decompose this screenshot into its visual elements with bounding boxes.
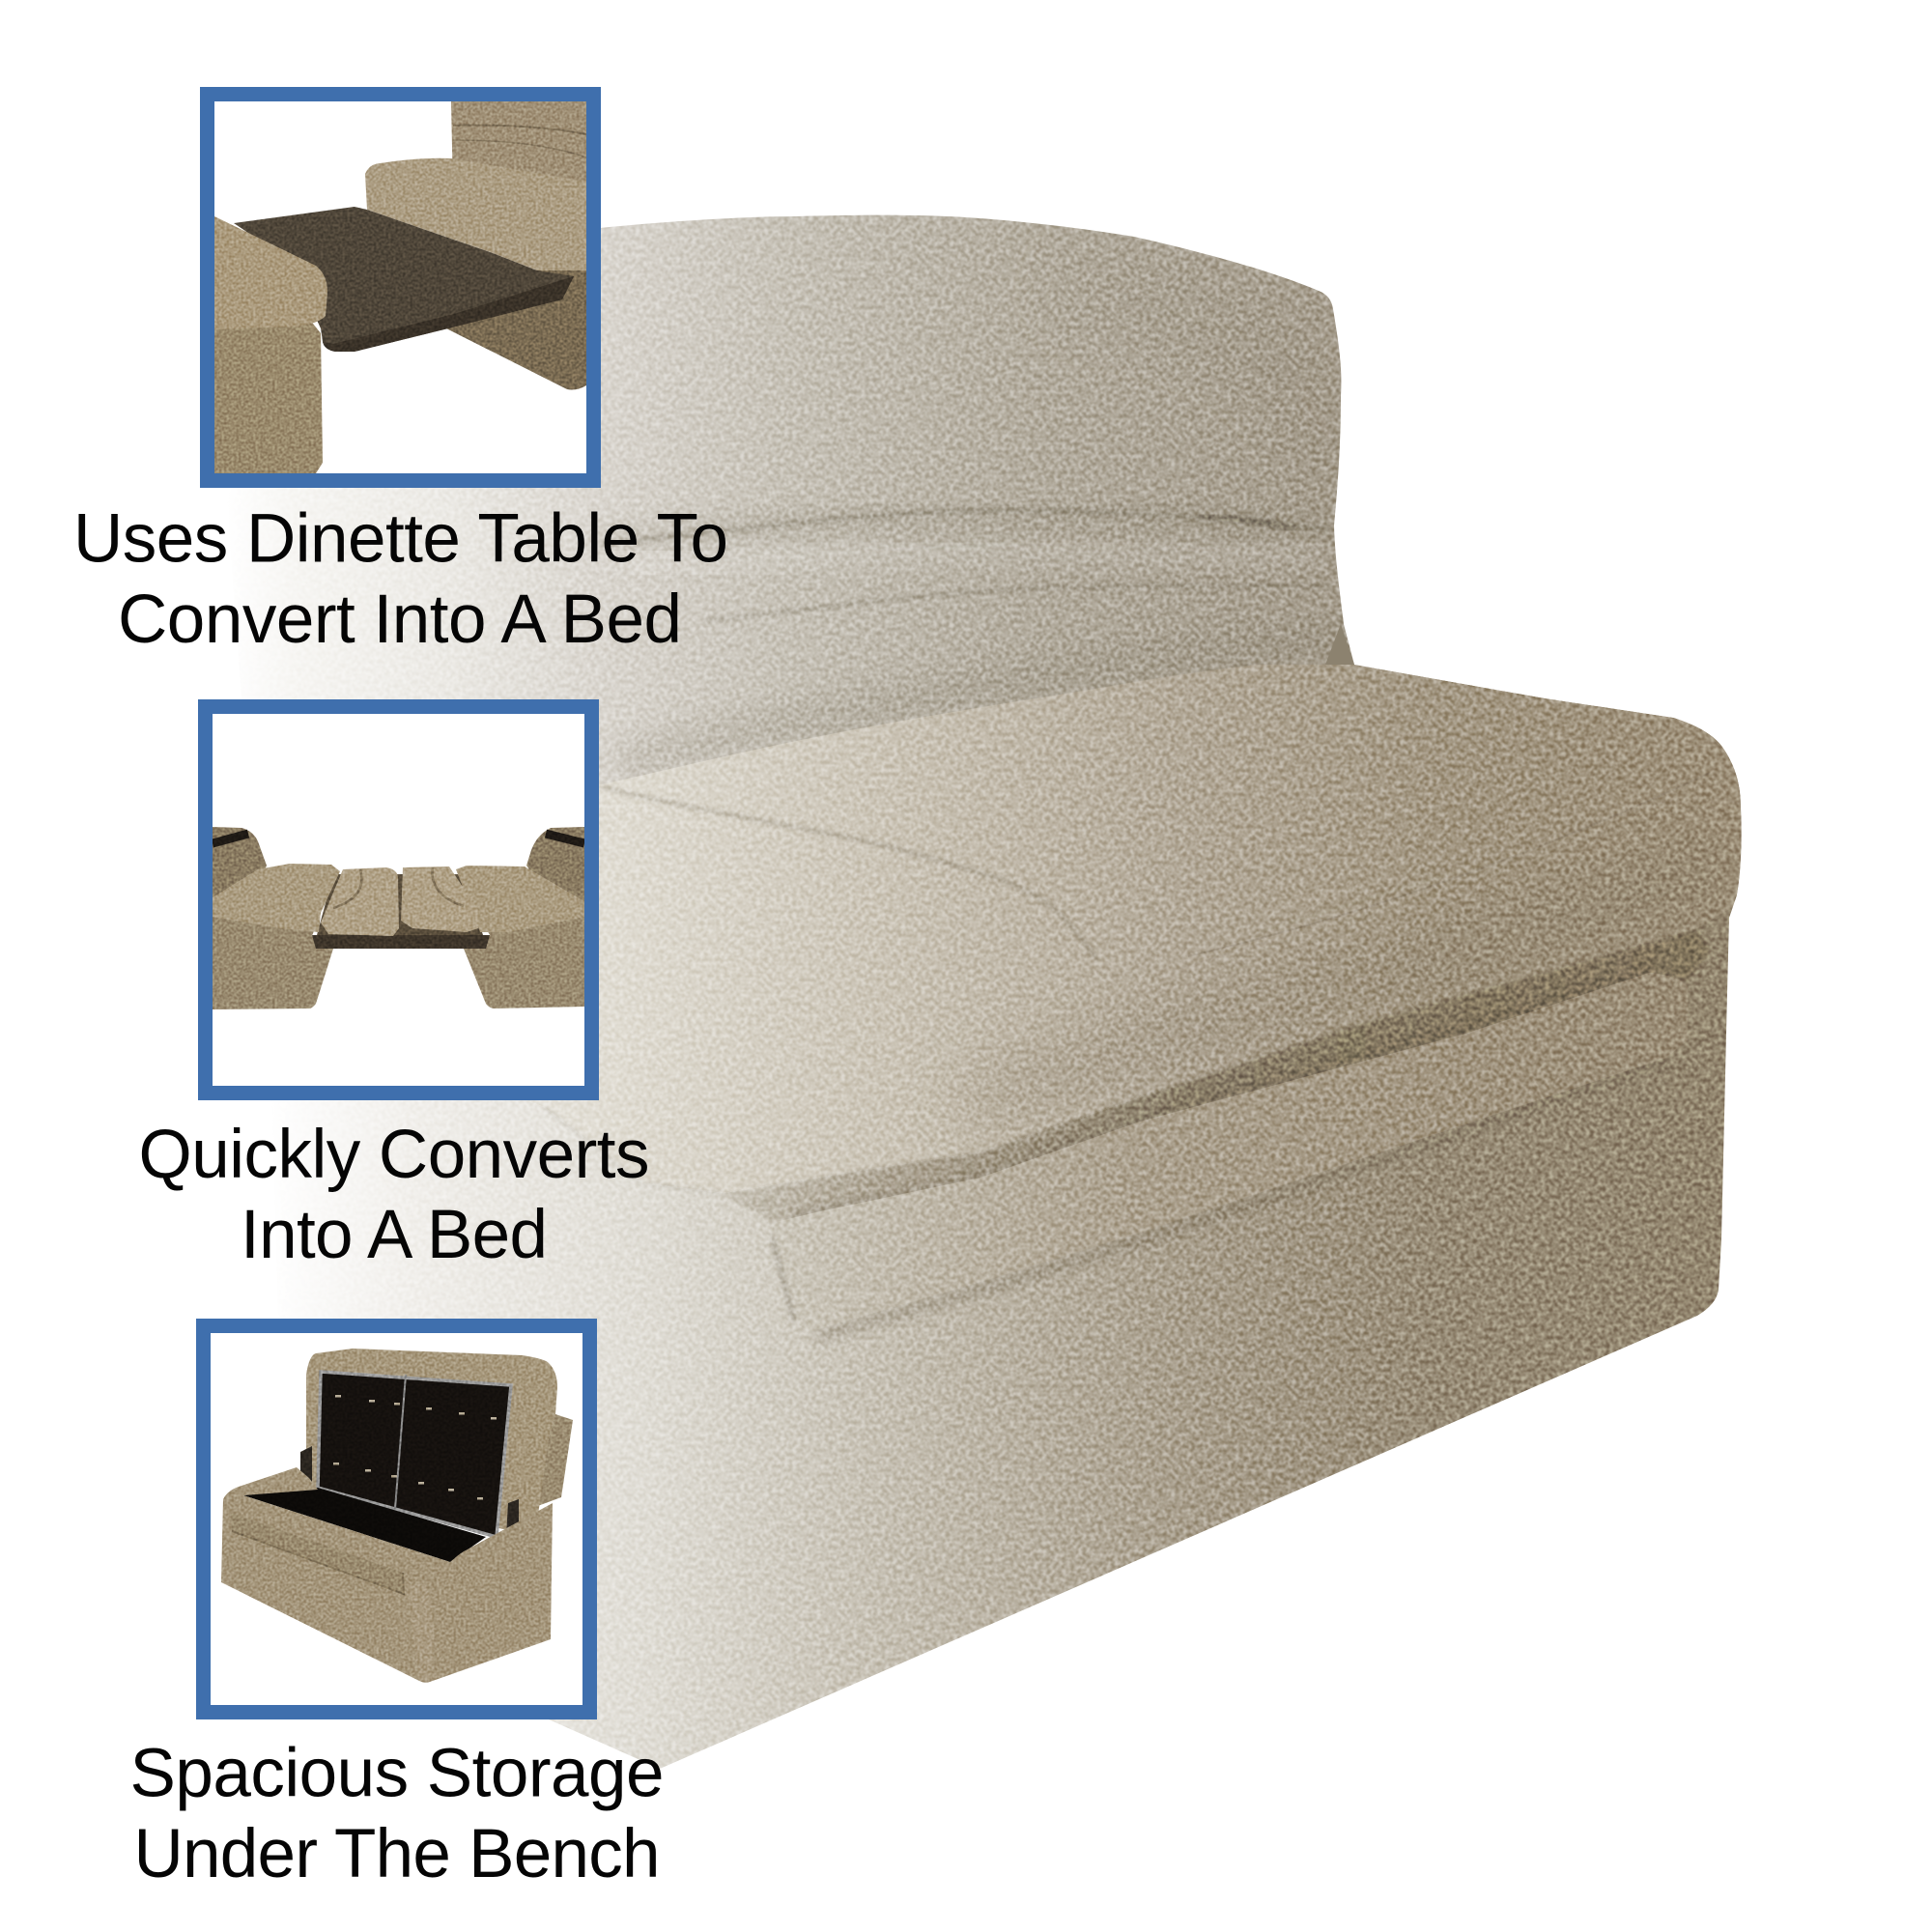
sofa seat cushion [527,665,1742,1193]
recess shadow under seat [724,930,1710,1224]
panel frame [205,707,591,1094]
seat shading [602,773,1729,1106]
photo: flat bed [213,827,584,1009]
caption: storage: Under The Bench [133,1816,661,1892]
photo: table between seats [214,101,586,473]
panel frame [207,95,593,481]
panel: under-bench storage [203,1325,589,1712]
sofa front panel [251,903,1739,1787]
caption: quick conversion: Into A Bed [241,1197,548,1273]
rail shadow below [816,1061,1666,1337]
main product photo: bench sofa [193,193,1777,1787]
caption: dinette table [73,500,728,658]
caption: dinette table: Convert Into A Bed [118,582,682,658]
panel: dinette table conversion [207,95,593,481]
panel: quick conversion [205,707,591,1094]
caption: storage [129,1735,665,1892]
fabric texture [429,214,1742,1768]
seat lower-left edge [544,1107,724,1193]
rail end shadow [772,1236,794,1321]
panel frame [203,1325,589,1712]
right hinge nub behind back [1325,624,1354,665]
photo: open storage [211,1333,582,1705]
backrest shading [602,290,1343,763]
caption: storage: Spacious Storage [129,1735,665,1812]
caption: quick conversion: Quickly Converts [139,1117,649,1193]
sofa backrest [261,214,1372,784]
caption: quick conversion [139,1117,649,1273]
front rail [772,973,1688,1331]
caption: dinette table: Uses Dinette Table To [73,500,728,578]
